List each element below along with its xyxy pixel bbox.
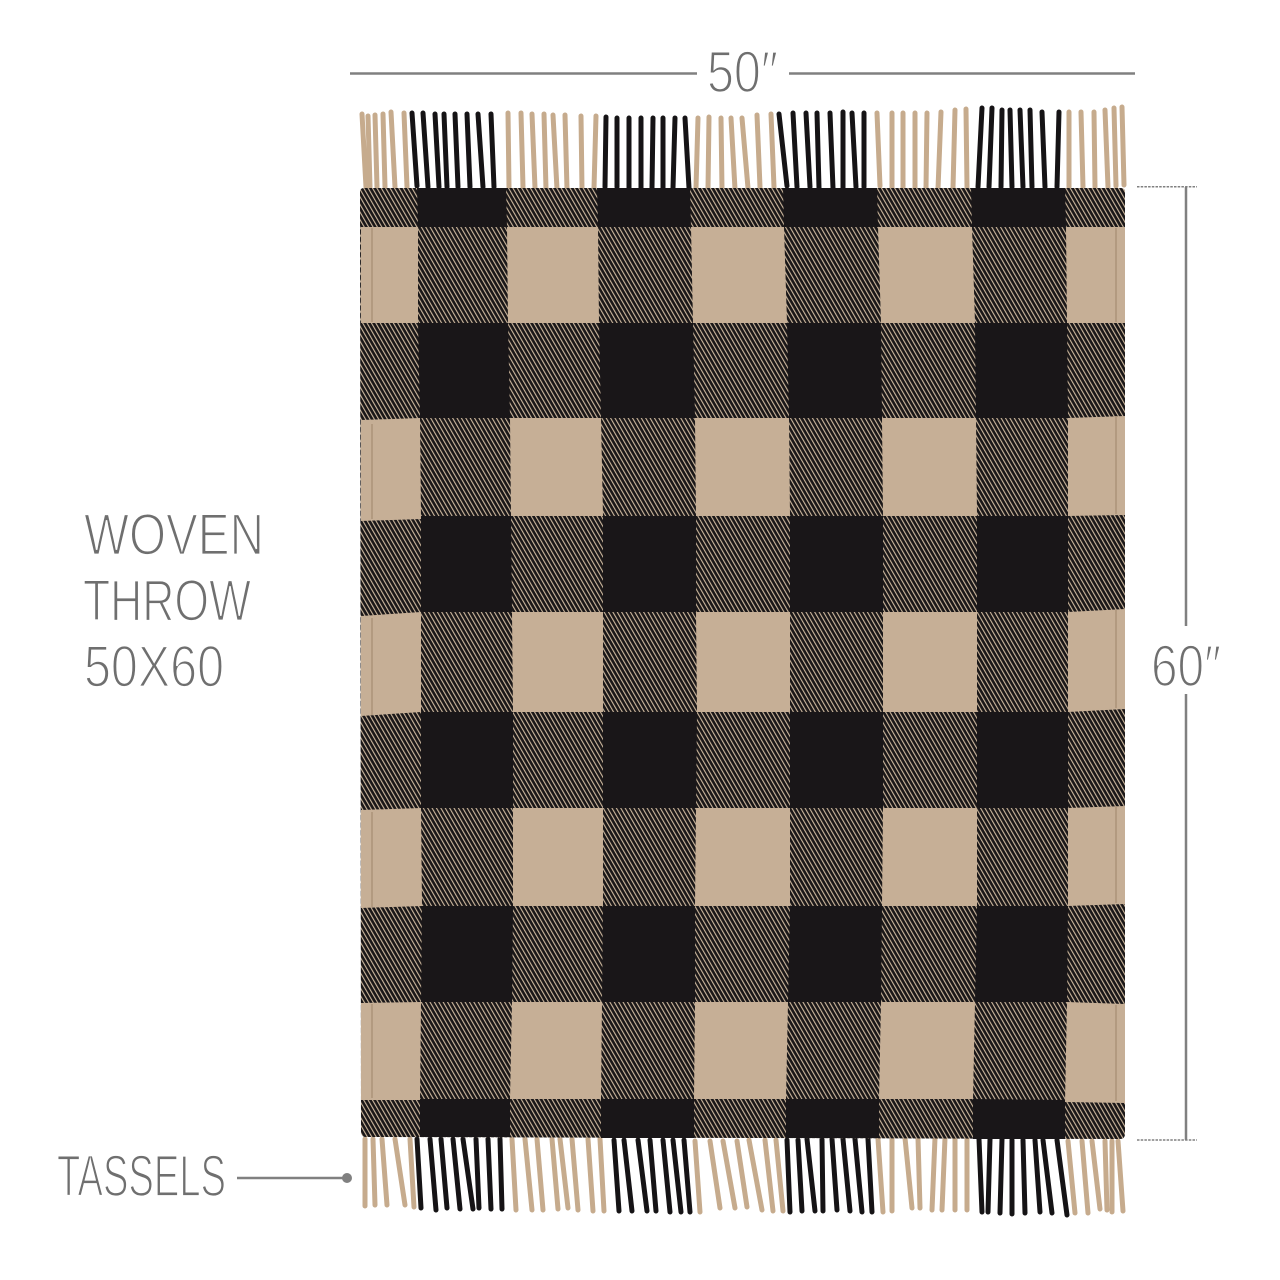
- height label: 60″: [1151, 634, 1221, 699]
- top fringe tassels: [362, 107, 1124, 189]
- leader dot: [342, 1173, 352, 1183]
- width dimension line: [350, 72, 1135, 75]
- bottom fringe tassels: [365, 1138, 1123, 1215]
- selvedge fold lines: [372, 228, 1116, 1101]
- tassels callout: [57, 1144, 352, 1209]
- product title: [83, 502, 264, 700]
- height dimension line: [1137, 187, 1197, 1140]
- leader line: [237, 1177, 345, 1179]
- black tassels top: [412, 108, 1059, 188]
- title line: size: 50X60: [84, 634, 224, 700]
- tassels label: TASSELS: [57, 1144, 226, 1209]
- width label: 50″: [707, 40, 778, 105]
- twill base: [360, 188, 1125, 1139]
- title line: throw: THROW: [83, 568, 251, 634]
- black squares: [417, 188, 1068, 1139]
- tan tassels top: [362, 107, 1124, 189]
- tan tassels bottom: [365, 1138, 1123, 1213]
- title line: woven: WOVEN: [84, 502, 264, 568]
- black tassels bottom: [417, 1139, 1067, 1215]
- plaid fabric: [360, 188, 1125, 1139]
- cream squares: [361, 227, 1125, 1103]
